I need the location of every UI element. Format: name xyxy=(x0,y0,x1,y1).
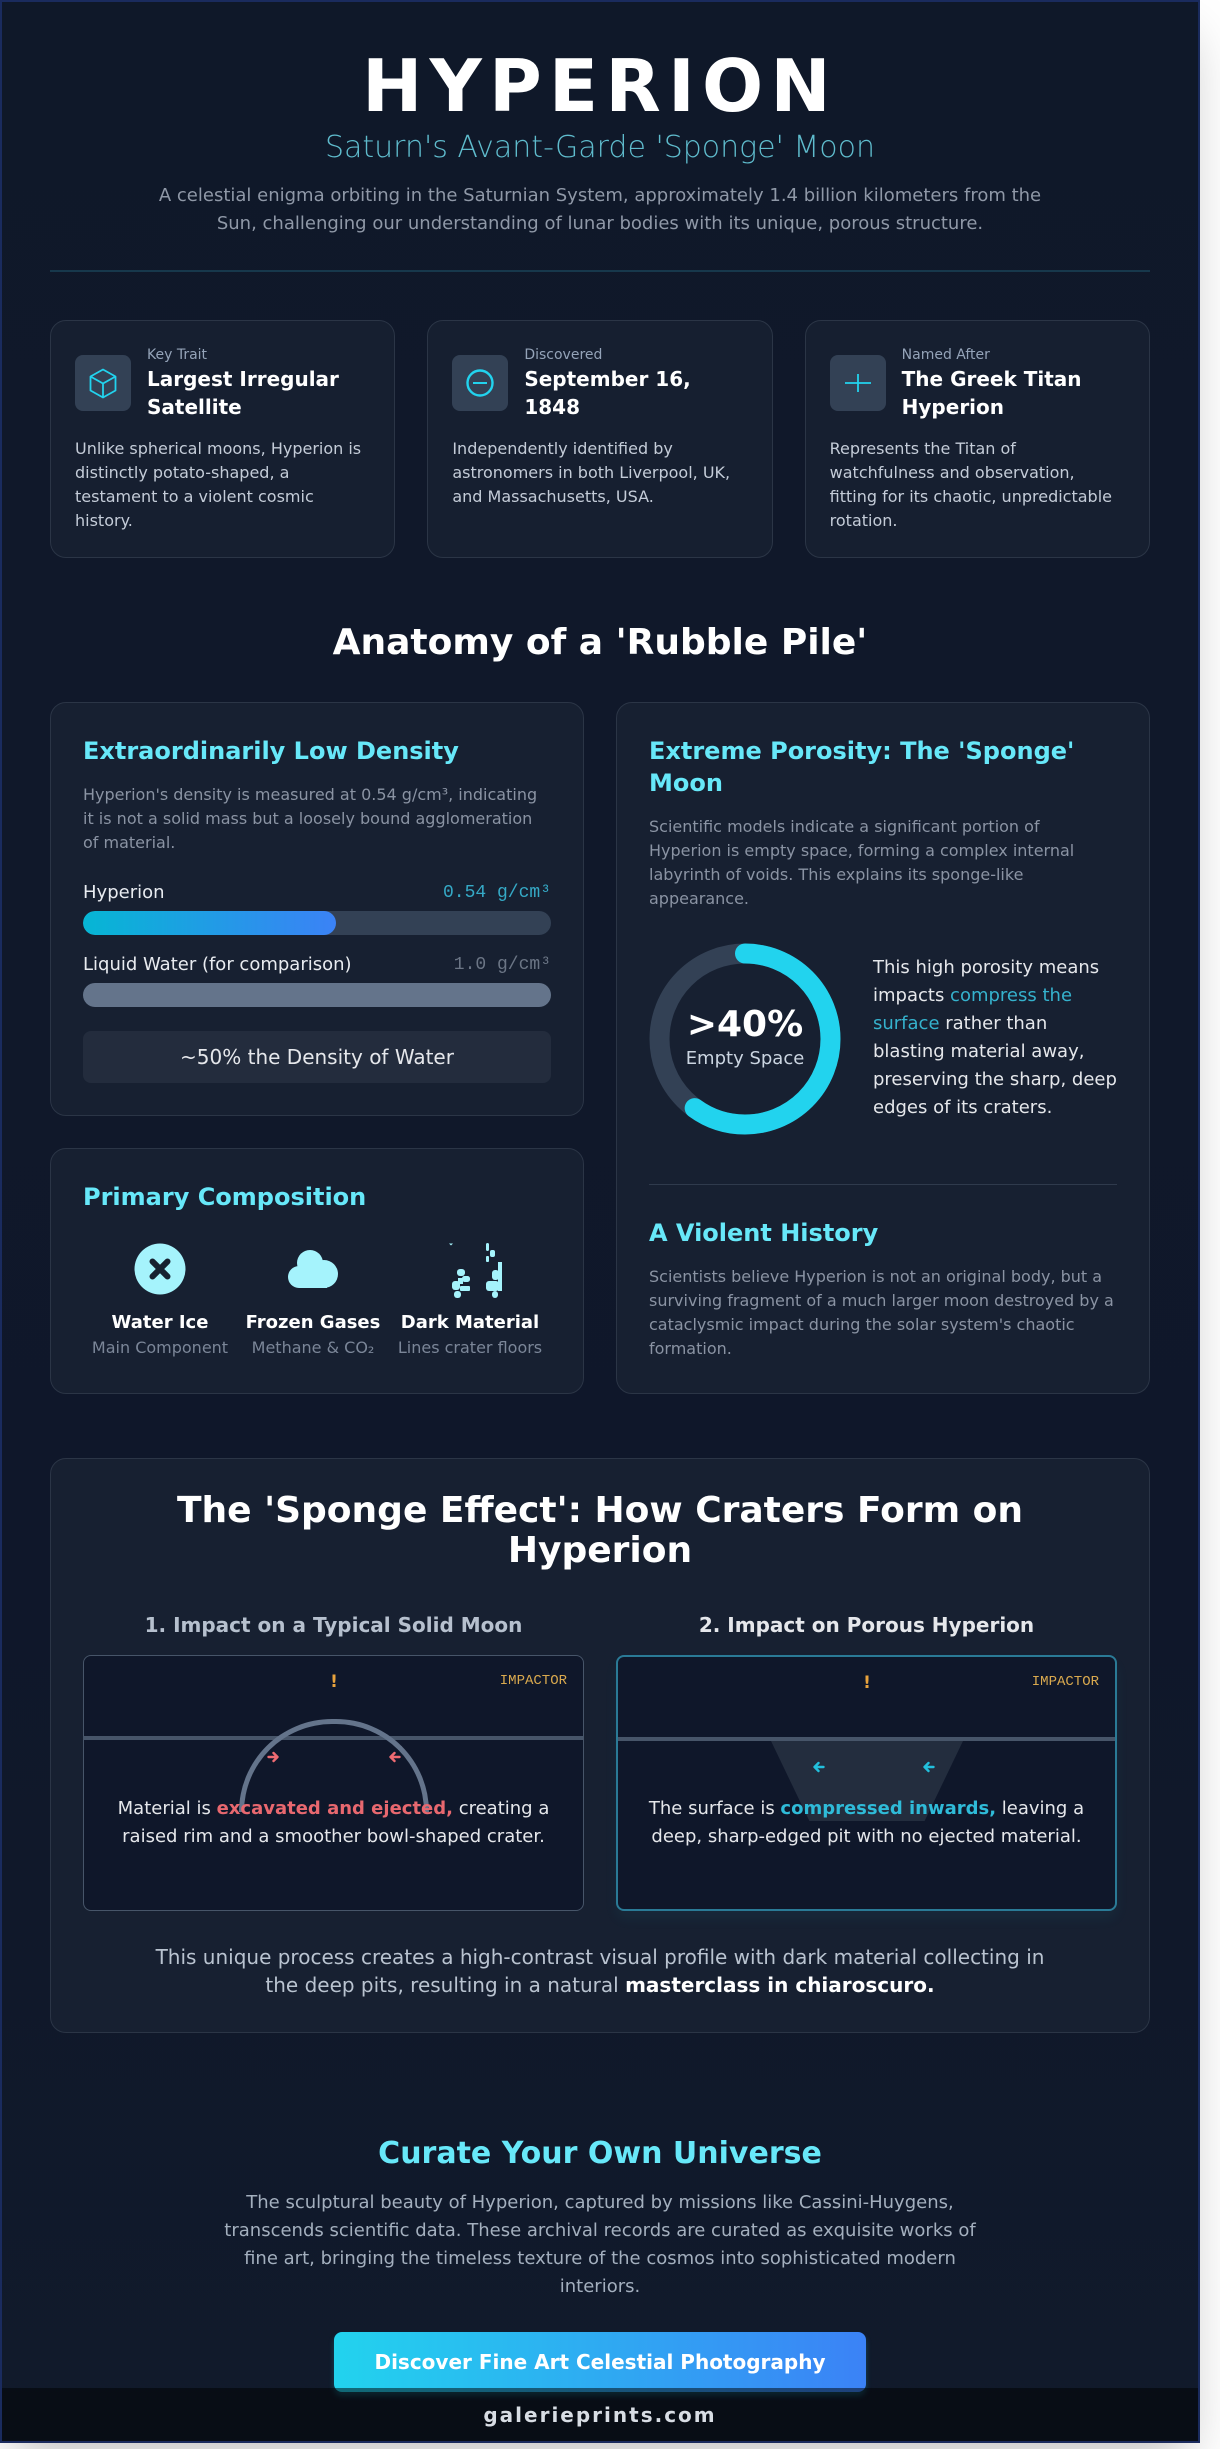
donut value: >40% xyxy=(687,1004,803,1045)
diagram caption xyxy=(648,1798,1084,1847)
diagram: porous crater xyxy=(616,1655,1117,1911)
comparison title: 1. Impact on a Typical Solid Moon xyxy=(145,1613,522,1637)
icon: clock circle xyxy=(452,355,508,411)
sponge effect conclusion: This unique process creates a high-contrast visual profile with dark material collecting in xyxy=(156,1945,1044,1969)
history heading: A Violent History xyxy=(649,1219,878,1247)
callout: density ratio: ~50% the Density of Water xyxy=(180,1045,454,1069)
arrow: inward left xyxy=(813,1762,825,1772)
section heading: sponge effect xyxy=(177,1490,1023,1571)
section heading: sponge effect: Hyperion xyxy=(508,1530,692,1571)
composition item: frozen gases xyxy=(246,1250,380,1357)
impactor label: IMPACTOR xyxy=(500,1673,567,1689)
panel heading: Extreme Porosity: The 'Sponge' xyxy=(649,737,1074,765)
card heading text: The Greek Titan xyxy=(902,367,1082,391)
divider and history block xyxy=(649,1184,1117,1362)
panel description: Hyperion's density is measured at 0.54 g/cm³, indicating xyxy=(83,785,537,804)
card header xyxy=(830,347,1082,419)
donut caption: Empty Space xyxy=(686,1048,804,1069)
arrow: inward right xyxy=(923,1762,935,1772)
card body text xyxy=(75,439,361,530)
cta paragraph: interiors. xyxy=(560,2276,640,2297)
subtitle: Saturn's Avant-Garde 'Sponge' Moon xyxy=(325,130,875,165)
impactor label: IMPACTOR xyxy=(1032,1674,1099,1690)
crater rim arc xyxy=(239,1719,429,1812)
composition item: dark material xyxy=(398,1243,542,1357)
diagram caption xyxy=(118,1798,549,1847)
impactor marker: ! xyxy=(330,1672,338,1692)
surface line xyxy=(618,1737,1115,1741)
panel description: appearance. xyxy=(649,889,749,908)
porosity explanation xyxy=(872,957,1117,1118)
card heading text: 1848 xyxy=(524,395,580,419)
section heading: sponge effect: The 'Sponge Effect': How Craters Form on xyxy=(177,1490,1023,1531)
item note: Main Component xyxy=(92,1338,228,1357)
card heading text xyxy=(524,347,691,419)
item label: Dark Material xyxy=(401,1312,539,1333)
card header xyxy=(75,347,339,419)
card body text: Represents the Titan of xyxy=(830,439,1016,458)
panel description: Scientific models indicate a significant portion of xyxy=(649,817,1040,836)
cta paragraph: fine art, bringing the timeless texture of the cosmos into sophisticated modern xyxy=(244,2248,956,2269)
composition item: water ice xyxy=(92,1244,228,1357)
panel description: of material. xyxy=(83,833,175,852)
cta button xyxy=(334,2332,866,2392)
footer: galerieprints.com xyxy=(483,2403,717,2427)
card body text: rotation. xyxy=(830,511,897,530)
donut chart: 40% empty space xyxy=(650,944,840,1134)
card: named after xyxy=(805,320,1150,558)
bar: hyperion density xyxy=(83,911,551,935)
cta paragraph: The sculptural beauty of Hyperion, captured by missions like Cassini-Huygens, xyxy=(246,2192,954,2213)
item label: Water Ice xyxy=(112,1312,208,1333)
panel: sponge effect xyxy=(50,1458,1150,2033)
callout: density ratio xyxy=(83,1031,551,1083)
icon: ice circle xyxy=(134,1244,186,1294)
item note: Methane & CO₂ xyxy=(252,1338,374,1357)
diagram caption: raised rim and a smoother bowl-shaped crater. xyxy=(122,1826,545,1847)
icon: cloud xyxy=(288,1250,338,1288)
cta heading: Curate Your Own Universe xyxy=(378,2136,822,2171)
panel: primary composition xyxy=(50,1148,584,1394)
history text xyxy=(649,1267,1114,1358)
card body text: distinctly potato-shaped, a xyxy=(75,463,289,482)
bar label: liquid water xyxy=(83,954,551,975)
comparison: typical solid moon xyxy=(83,1613,584,1911)
intro paragraph: Sun, challenging our understanding of lunar bodies with its unique, porous structure. xyxy=(217,213,983,234)
card body text: astronomers in both Liverpool, UK, xyxy=(452,463,730,482)
card body text xyxy=(830,439,1112,530)
panel heading: Primary Composition xyxy=(83,1183,366,1211)
card heading text: September 16, xyxy=(524,367,691,391)
panel description: Hyperion is empty space, forming a complex internal xyxy=(649,841,1074,860)
card: key trait xyxy=(50,320,395,558)
card heading text: Named After xyxy=(902,347,990,363)
cta button: Discover Fine Art Celestial Photography xyxy=(374,2350,826,2374)
item label: Frozen Gases xyxy=(246,1312,380,1333)
crater pit xyxy=(771,1741,963,1821)
panel: low density xyxy=(50,702,584,1116)
diagram: solid moon crater xyxy=(83,1655,584,1911)
card heading text xyxy=(902,347,1082,419)
porosity explanation: edges of its craters. xyxy=(873,1097,1052,1118)
panel description: labyrinth of voids. This explains its sponge-like xyxy=(649,865,1023,884)
arrow: inward left xyxy=(267,1752,279,1762)
diagram caption: The surface is compressed inwards, leaving a xyxy=(649,1798,1084,1819)
arrow: inward right xyxy=(389,1752,401,1762)
surface line xyxy=(84,1736,583,1740)
comparison: porous hyperion xyxy=(616,1613,1117,1911)
panel description xyxy=(649,817,1074,908)
panel description: it is not a solid mass but a loosely bound agglomeration xyxy=(83,809,532,828)
porosity explanation: preserving the sharp, deep xyxy=(873,1069,1117,1090)
history text: Scientists believe Hyperion is not an original body, but a xyxy=(649,1267,1102,1286)
history text: surviving fragment of a much larger moon destroyed by a xyxy=(649,1291,1114,1310)
bar: water density xyxy=(83,983,551,1007)
sponge effect conclusion xyxy=(156,1945,1044,1997)
bar label: hyperion: Hyperion xyxy=(83,882,165,903)
porosity explanation: impacts compress the xyxy=(873,985,1072,1006)
sponge effect conclusion: the deep pits, resulting in a natural masterclass in chiaroscuro. xyxy=(265,1973,935,1997)
diagram caption: Material is excavated and ejected, creating a xyxy=(118,1798,549,1819)
porosity explanation: This high porosity means xyxy=(873,957,1099,978)
card heading text: Hyperion xyxy=(902,395,1004,419)
card body text: watchfulness and observation, xyxy=(830,463,1075,482)
cta paragraph: transcends scientific data. These archival records are curated as exquisite works of xyxy=(224,2220,976,2241)
porosity explanation: blasting material away, xyxy=(873,1041,1084,1062)
bar label: hyperion: 0.54 g/cm³ xyxy=(443,883,551,903)
item note: Lines crater floors xyxy=(398,1338,542,1357)
comparison title: 2. Impact on Porous Hyperion xyxy=(699,1613,1034,1637)
impactor marker: ! xyxy=(863,1673,871,1693)
card heading text: Discovered xyxy=(524,347,602,363)
icon: glitched dark material xyxy=(449,1243,502,1298)
bar label: liquid water: 1.0 g/cm³ xyxy=(454,955,551,975)
card body text: Independently identified by xyxy=(452,439,673,458)
history text: formation. xyxy=(649,1339,732,1358)
icon: cube xyxy=(75,355,131,411)
section heading: anatomy: Anatomy of a 'Rubble Pile' xyxy=(333,622,867,663)
header xyxy=(50,44,1150,272)
icon: plus xyxy=(830,355,886,411)
panel: porosity and history xyxy=(616,702,1150,1394)
bar chart: density comparison xyxy=(83,882,551,1007)
card body text: testament to a violent cosmic xyxy=(75,487,314,506)
panel heading: Moon xyxy=(649,769,723,797)
panel heading xyxy=(649,737,1074,797)
bar label: liquid water: Liquid Water (for comparison) xyxy=(83,954,352,975)
card body text: Unlike spherical moons, Hyperion is xyxy=(75,439,361,458)
card body text: fitting for its chaotic, unpredictable xyxy=(830,487,1112,506)
card heading text: Key Trait xyxy=(147,347,207,363)
intro paragraph: A celestial enigma orbiting in the Saturnian System, approximately 1.4 billion kilometers from the xyxy=(159,185,1041,206)
panel heading: Extraordinarily Low Density xyxy=(83,737,459,765)
card: discovered xyxy=(427,320,773,558)
card header xyxy=(452,347,691,419)
bar label: hyperion xyxy=(83,882,551,903)
intro paragraph xyxy=(159,185,1041,234)
history text: cataclysmic impact during the solar system's chaotic xyxy=(649,1315,1075,1334)
footer xyxy=(2,2388,1198,2441)
card body text: and Massachusetts, USA. xyxy=(452,487,654,506)
call to action section xyxy=(224,2136,976,2397)
card body text: history. xyxy=(75,511,133,530)
panel description xyxy=(83,785,537,852)
header divider xyxy=(50,270,1150,272)
card body text xyxy=(452,439,730,506)
porosity explanation: surface rather than xyxy=(873,1013,1047,1034)
card heading text: Largest Irregular Satellite xyxy=(147,367,339,419)
diagram caption: deep, sharp-edged pit with no ejected material. xyxy=(651,1826,1082,1847)
cta paragraph xyxy=(224,2192,976,2297)
title: HYPERION xyxy=(362,44,838,128)
